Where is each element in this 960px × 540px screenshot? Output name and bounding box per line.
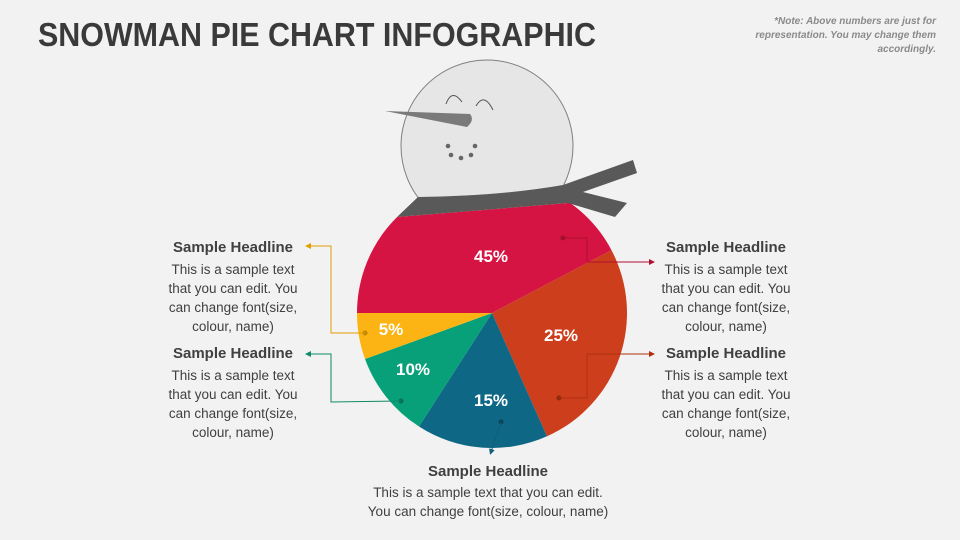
percent labels: 25% [544, 326, 578, 345]
text: bottom right: colour, name) [685, 425, 767, 440]
title: SNOWMAN PIE CHART INFOGRAPHIC [38, 16, 596, 53]
text: top right: Sample Headline [666, 239, 786, 256]
text: bottom: Sample Headline [428, 463, 548, 480]
text: bottom right: can change font(size, [662, 406, 790, 421]
text: top left: colour, name) [192, 319, 274, 334]
text: bottom right [661, 345, 791, 440]
text: bottom left [168, 345, 298, 440]
text: bottom [368, 463, 608, 519]
connectors [308, 236, 652, 452]
text: top right [661, 239, 791, 334]
text: top left: Sample Headline [173, 239, 293, 256]
percent labels: 10% [396, 360, 430, 379]
text: bottom right: This is a sample text [664, 368, 788, 383]
note: *Note: Above numbers are just for [774, 16, 937, 27]
text: bottom left: Sample Headline [173, 345, 293, 362]
note: accordingly. [877, 44, 936, 55]
text: bottom left: colour, name) [192, 425, 274, 440]
text: bottom left: that you can edit. You [168, 387, 298, 402]
text: bottom: This is a sample text that you can edit. [373, 485, 603, 500]
text: bottom right: Sample Headline [666, 345, 786, 362]
pie chart [357, 178, 627, 448]
text: top right: can change font(size, [662, 300, 790, 315]
percent labels: 15% [474, 391, 508, 410]
text: bottom left: can change font(size, [169, 406, 297, 421]
text: bottom: You can change font(size, colour, name) [368, 504, 608, 519]
snowman head [385, 60, 573, 232]
text: top right: This is a sample text [664, 262, 788, 277]
text: top right: that you can edit. You [661, 281, 791, 296]
note: representation. You may change them [755, 30, 936, 41]
text: bottom left: This is a sample text [171, 368, 295, 383]
text: top right: colour, name) [685, 319, 767, 334]
text: top left: that you can edit. You [168, 281, 298, 296]
percent labels: 45% [474, 247, 508, 266]
text: bottom right: that you can edit. You [661, 387, 791, 402]
scarf [397, 160, 637, 217]
text: top left [168, 239, 298, 334]
percent labels [379, 247, 578, 410]
percent labels: 5% [379, 320, 403, 339]
text: top left: can change font(size, [169, 300, 297, 315]
text: top left: This is a sample text [171, 262, 295, 277]
note [755, 16, 937, 55]
